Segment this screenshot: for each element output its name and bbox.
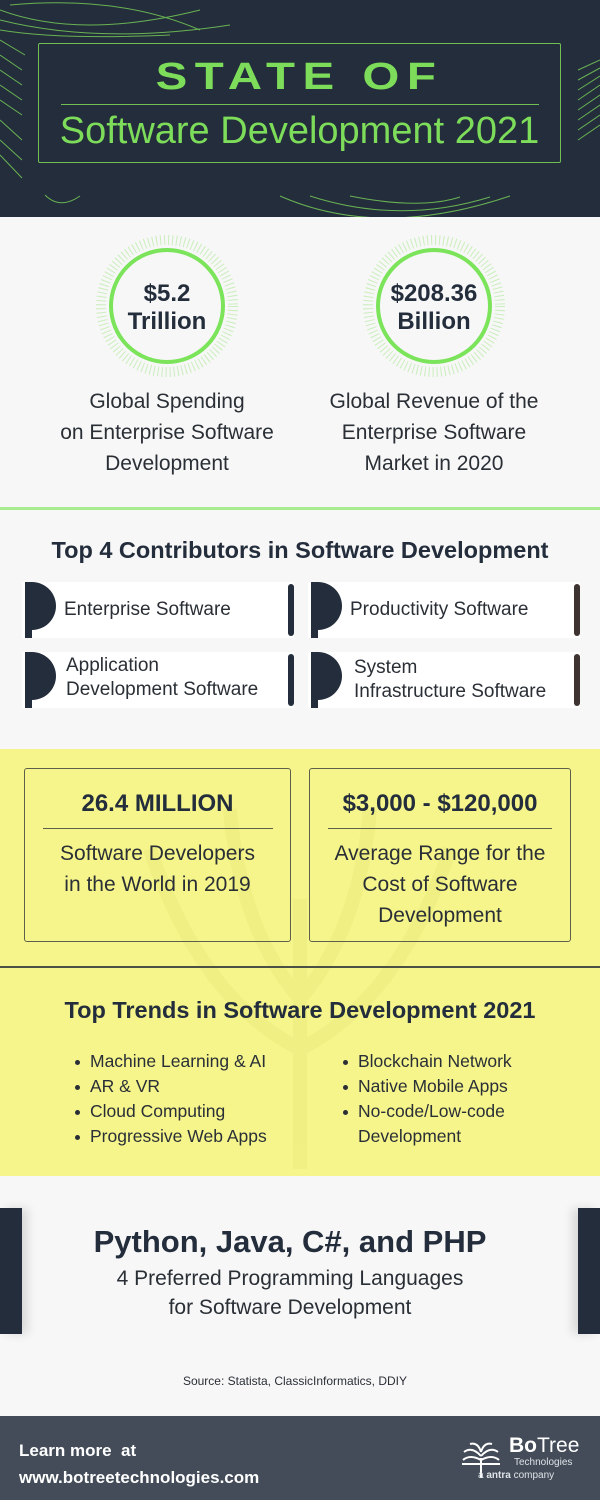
logo: BoTree: Technologies <box>514 1457 572 1468</box>
box: cost range: $3,000 - $120,000 <box>343 790 537 817</box>
heading: top trends: Top Trends in Software Development 2021 <box>64 997 536 1023</box>
box: 26.4 million: 26.4 MILLION <box>81 790 234 817</box>
languages section: 4 Preferred Programming Languages <box>117 1267 463 1290</box>
card: Application Development Software: Application <box>66 655 159 676</box>
caption: Global Spending <box>89 390 245 413</box>
stat: $5.2 Trillion <box>60 235 274 475</box>
trends list left: AR & VR <box>90 1076 160 1096</box>
card: Productivity Software <box>308 582 580 638</box>
box: cost range: Development <box>378 904 502 927</box>
box: cost range: Cost of Software <box>362 873 518 896</box>
caption: Global Revenue of the <box>330 390 538 413</box>
trends list right <box>343 1051 512 1146</box>
box: cost range: Average Range for the <box>335 842 545 865</box>
footer: Learn more at <box>19 1441 136 1460</box>
footer <box>0 1416 600 1500</box>
languages section <box>0 1206 600 1336</box>
stat: $208.36 Billion: $208.36 <box>391 280 477 307</box>
trends list right: No-code/Low-code <box>358 1101 505 1121</box>
box: cost range <box>309 768 571 942</box>
caption <box>60 390 274 475</box>
yellow section <box>0 749 600 1176</box>
subtitle: Software Development 2021 <box>60 110 539 152</box>
trends list right: Development <box>358 1126 461 1146</box>
languages section: for Software Development <box>169 1296 411 1319</box>
card: Enterprise Software: Enterprise Software <box>64 599 231 620</box>
logo: BoTree: BoTree <box>509 1434 579 1457</box>
header banner <box>0 0 600 217</box>
card: Productivity Software: Productivity Software <box>350 599 528 620</box>
stat: $5.2 Trillion: Trillion <box>128 308 206 335</box>
card: System Infrastructure Software <box>308 652 580 708</box>
caption <box>330 390 538 475</box>
heading: top 4 contributors: Top 4 Contributors in Software Development <box>51 537 548 563</box>
trends list left: Machine Learning & AI <box>90 1051 266 1071</box>
logo: BoTree: a antra company <box>478 1470 554 1481</box>
logo: BoTree <box>462 1434 579 1481</box>
caption: on Enterprise Software <box>60 421 274 444</box>
heading: languages: Python, Java, C#, and PHP <box>94 1224 486 1259</box>
caption: Market in 2020 <box>365 452 503 475</box>
contributors list <box>25 582 580 708</box>
card: Application Development Software <box>22 652 294 708</box>
trends list right: Native Mobile Apps <box>358 1076 508 1096</box>
trends list left: Cloud Computing <box>90 1101 225 1121</box>
icon: circle <box>96 235 238 377</box>
trends list left <box>75 1051 267 1146</box>
title: STATE OF: STATE OF <box>156 56 443 98</box>
trends list left: Progressive Web Apps <box>90 1126 267 1146</box>
trends list right: Blockchain Network <box>358 1051 512 1071</box>
caption: Enterprise Software <box>342 421 526 444</box>
box: 26.4 million <box>24 768 291 942</box>
box: 26.4 million: in the World in 2019 <box>64 873 251 896</box>
icon: circle <box>363 235 505 377</box>
stat: $208.36 Billion <box>330 235 538 475</box>
title frame <box>38 43 561 163</box>
card: System Infrastructure Software: Infrastructure Software <box>354 681 546 702</box>
source: Source: Statista, ClassicInformatics, DDIY <box>183 1374 407 1388</box>
caption: Development <box>105 452 229 475</box>
stat: $208.36 Billion: Billion <box>397 308 471 335</box>
box: 26.4 million: Software Developers <box>60 842 255 865</box>
card: Application Development Software: Development Software <box>66 679 258 700</box>
card: System Infrastructure Software: System <box>354 657 417 678</box>
stat: $5.2 Trillion: $5.2 <box>144 280 190 307</box>
card: Enterprise Software <box>22 582 294 638</box>
footer: www.botreetechnologies.com <box>19 1468 259 1487</box>
